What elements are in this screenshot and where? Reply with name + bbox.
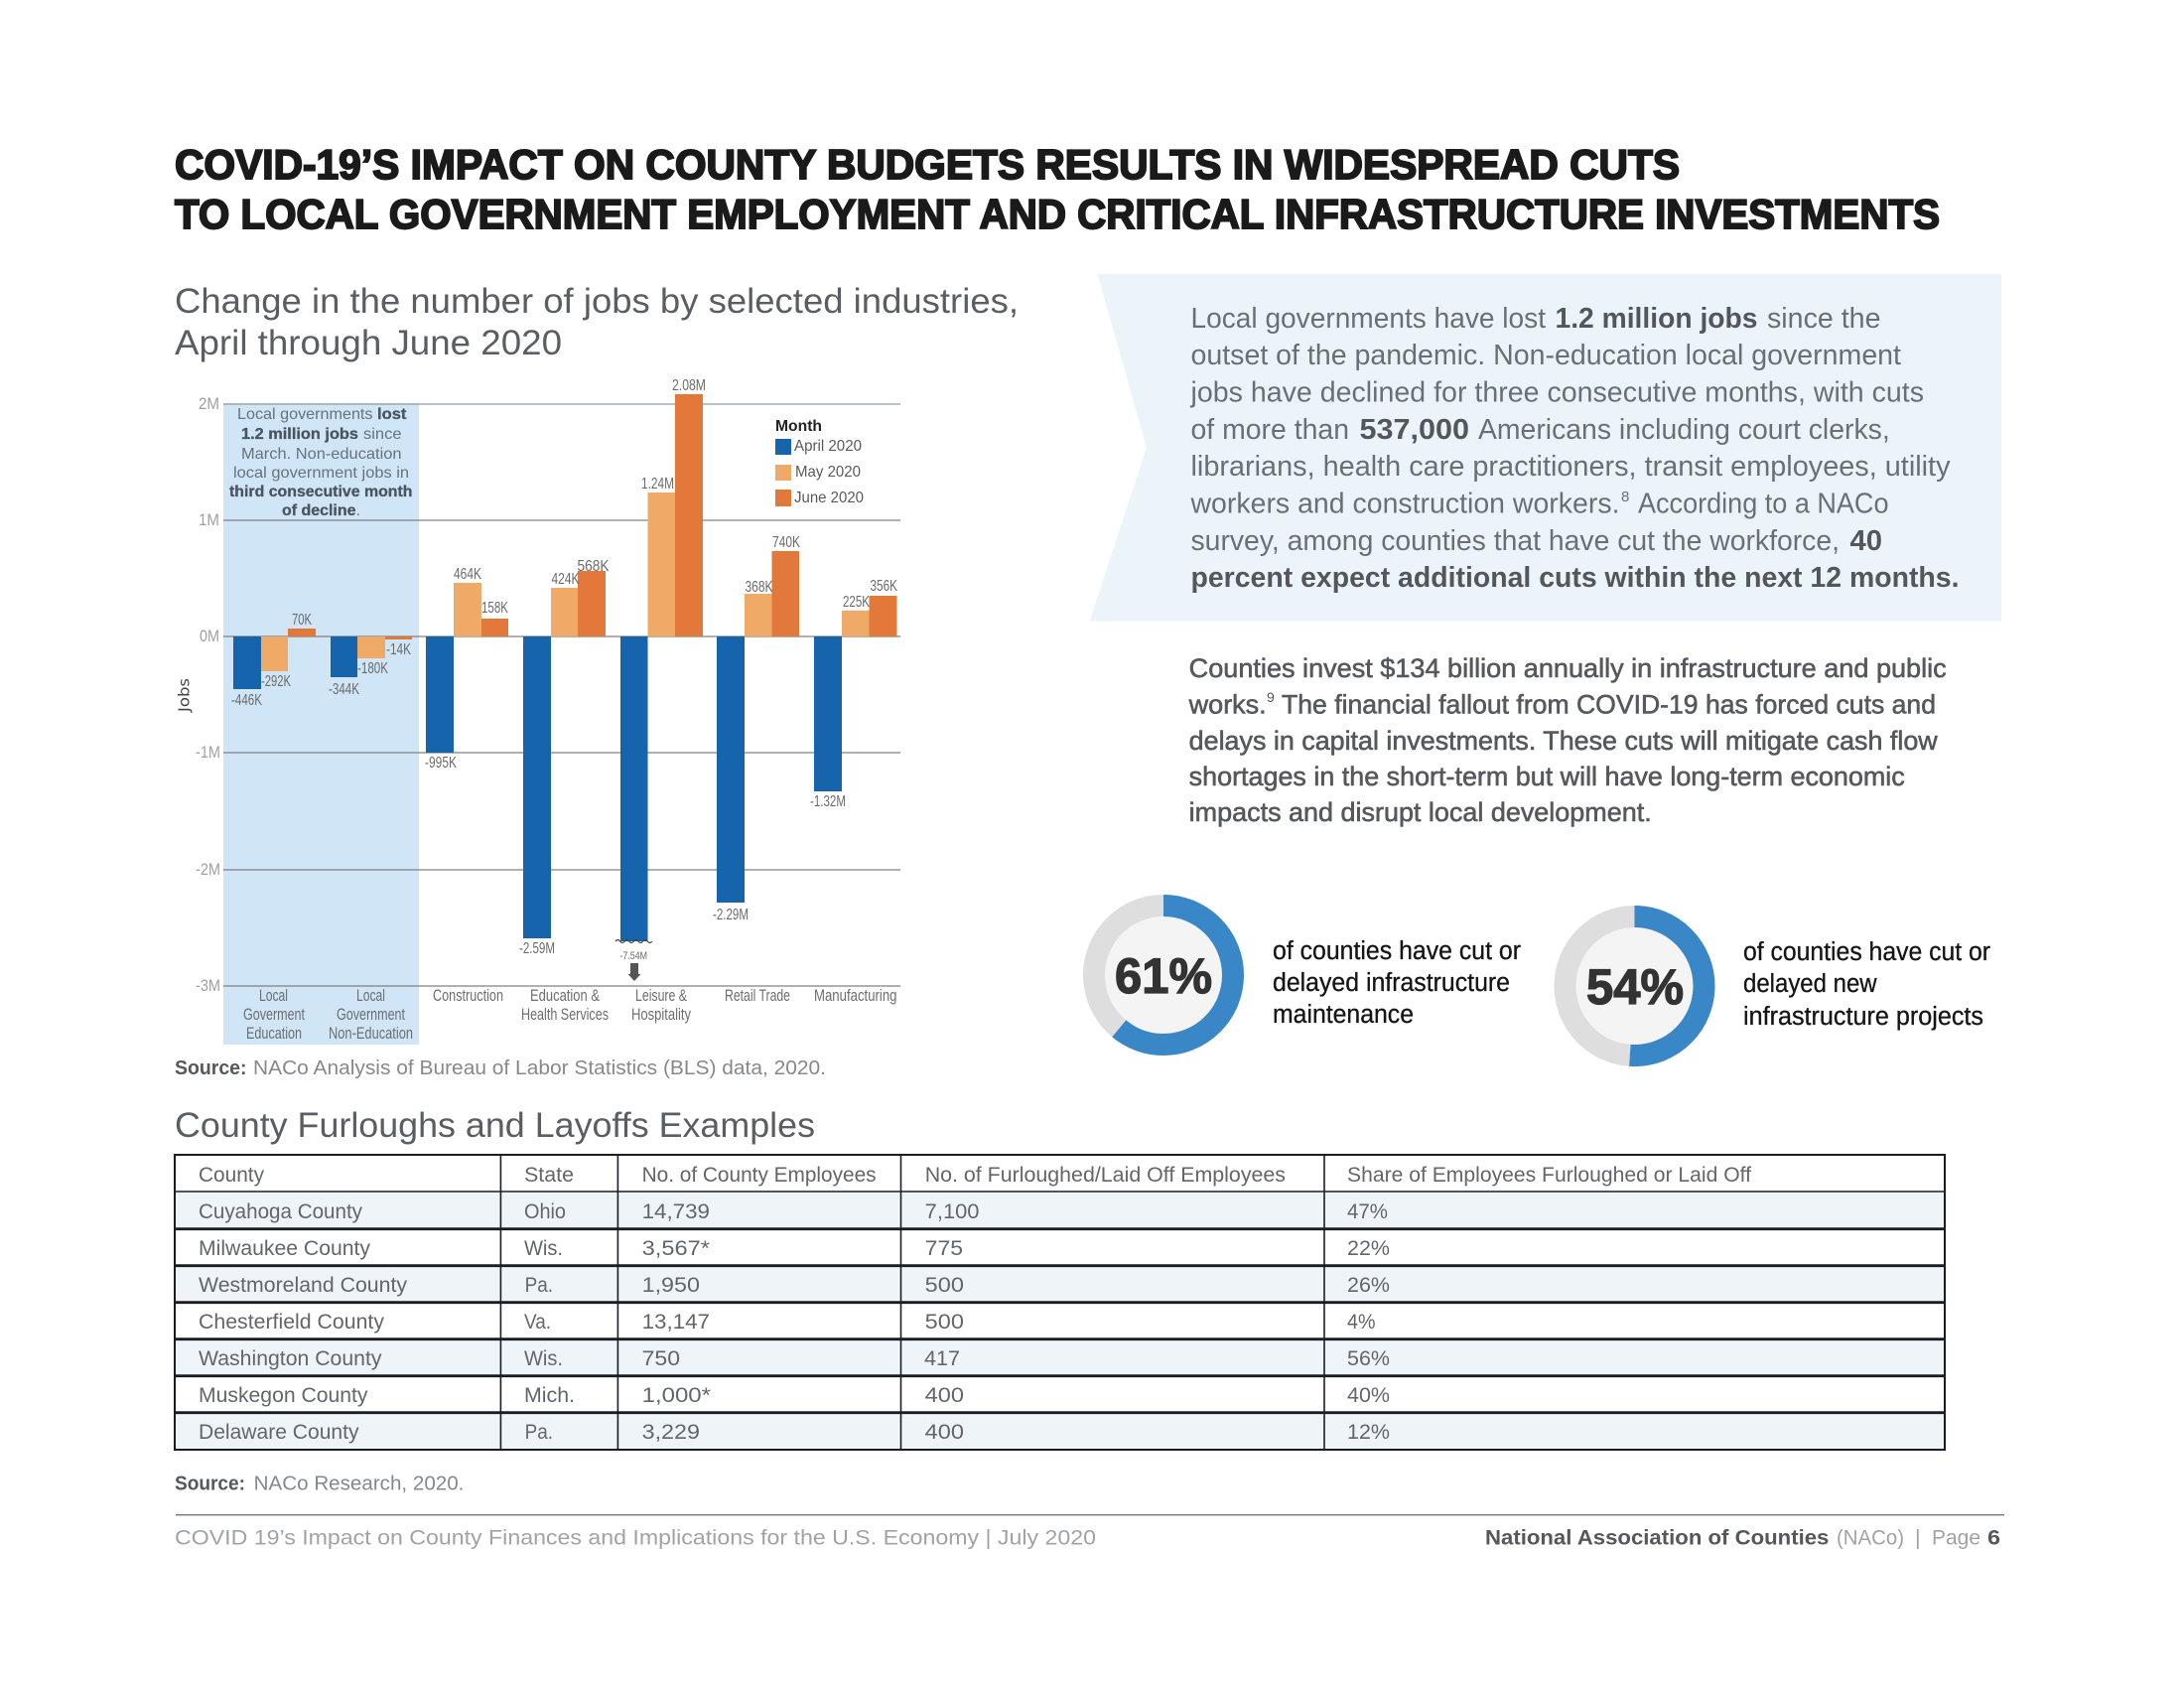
data labels: -14K bbox=[386, 641, 411, 658]
data labels: -446K bbox=[231, 692, 262, 709]
chart heading: Change in the number of jobs by selected industries, bbox=[175, 282, 1019, 321]
data labels: 356K bbox=[870, 578, 897, 595]
data labels: -180K bbox=[357, 660, 388, 677]
legend: Month bbox=[775, 418, 822, 435]
callout panel: 537,000 bbox=[1360, 414, 1469, 446]
row: Muskegon: Muskegon County bbox=[199, 1383, 368, 1407]
callout panel: According to a NACo bbox=[1638, 489, 1888, 520]
axis break on Leisure bar bbox=[615, 939, 652, 943]
row: Delaware: 12% bbox=[1347, 1420, 1390, 1444]
row: Muskegon: 400 bbox=[925, 1383, 964, 1407]
row: Chesterfield bbox=[199, 1310, 1376, 1334]
y axis labels bbox=[196, 395, 220, 995]
data labels: 225K bbox=[843, 594, 870, 611]
row: Delaware: Pa. bbox=[525, 1420, 553, 1444]
data labels: -344K bbox=[329, 681, 359, 698]
data labels: -995K bbox=[425, 755, 458, 772]
row: Westmoreland: 26% bbox=[1347, 1273, 1390, 1297]
row: Cuyahoga: 47% bbox=[1347, 1199, 1388, 1223]
callout panel: 1.2 million jobs bbox=[1555, 303, 1757, 335]
donut 54% caption bbox=[1743, 938, 1990, 1031]
table header row: No. of County Employees bbox=[642, 1163, 877, 1187]
annotation inside panel: Local governments bbox=[237, 406, 373, 423]
table header row: No. of Furloughed/Laid Off Employees bbox=[925, 1163, 1286, 1187]
row: Westmoreland bbox=[199, 1273, 1390, 1297]
chart heading: April through June 2020 bbox=[175, 324, 562, 362]
category labels: Education & bbox=[530, 987, 600, 1005]
row: Delaware: 3,229 bbox=[642, 1420, 700, 1444]
chart heading bbox=[175, 282, 1019, 362]
y axis title: Jobs bbox=[175, 678, 193, 713]
y axis labels: 1M bbox=[199, 511, 219, 529]
data labels: 158K bbox=[481, 600, 508, 617]
table header row bbox=[199, 1163, 1751, 1187]
row: Delaware: 400 bbox=[925, 1420, 964, 1444]
infrastructure paragraph: 9 bbox=[1267, 689, 1275, 705]
donut 61% caption: of counties have cut or bbox=[1273, 937, 1521, 965]
category labels bbox=[243, 987, 897, 1043]
callout panel: jobs have declined for three consecutive months, with cuts bbox=[1189, 377, 1924, 409]
row: Muskegon: 40% bbox=[1347, 1383, 1390, 1407]
title: COVID-19’S IMPACT ON COUNTY BUDGETS RESULTS IN WIDESPREAD CUTS bbox=[175, 141, 1680, 188]
data labels: 568K bbox=[578, 558, 610, 575]
footer: publication: COVID 19’s Impact on County Finances and Implications for the U.S. Economy | July 2020 bbox=[175, 1525, 1096, 1549]
data labels: 424K bbox=[552, 571, 580, 588]
donut 61% caption bbox=[1273, 937, 1521, 1029]
bars: June 2020 bbox=[288, 394, 897, 639]
category labels: Education bbox=[246, 1025, 302, 1043]
infrastructure paragraph: The financial fallout from COVID-19 has forced cuts and bbox=[1282, 689, 1936, 719]
row: Chesterfield: Va. bbox=[524, 1310, 551, 1334]
data labels: 464K bbox=[454, 566, 482, 583]
category labels: Government bbox=[337, 1006, 405, 1024]
row: Washington: 56% bbox=[1347, 1346, 1390, 1370]
row: Washington: Washington County bbox=[199, 1346, 382, 1370]
callout panel: Local governments have lost bbox=[1191, 303, 1546, 335]
row: Cuyahoga: 7,100 bbox=[925, 1199, 980, 1223]
row: Muskegon: 1,000* bbox=[642, 1383, 712, 1407]
donut 54% caption: delayed new bbox=[1743, 970, 1877, 998]
y axis labels: -2M bbox=[196, 861, 220, 879]
row: Cuyahoga: Cuyahoga County bbox=[199, 1199, 362, 1223]
category labels: Non-Education bbox=[329, 1025, 413, 1043]
data labels: 1.24M bbox=[641, 476, 674, 492]
infrastructure paragraph: works. bbox=[1188, 689, 1267, 719]
donut: 61% maintenance: 61% bbox=[1115, 948, 1212, 1004]
category labels: Manufacturing bbox=[814, 987, 897, 1005]
footer: organization and page: 6 bbox=[1987, 1525, 2000, 1549]
data labels: 2.08M bbox=[672, 377, 706, 394]
row: Delaware bbox=[199, 1420, 1390, 1444]
donut 61% caption: maintenance bbox=[1273, 1001, 1414, 1029]
bars: May 2020 bbox=[261, 492, 870, 671]
row: Milwaukee bbox=[199, 1236, 1390, 1260]
annotation inside panel: lost bbox=[377, 406, 407, 423]
table header row: State bbox=[524, 1163, 574, 1187]
row: Delaware: Delaware County bbox=[199, 1420, 359, 1444]
donut: 61% maintenance bbox=[1094, 906, 1233, 1045]
category labels: Local bbox=[356, 987, 385, 1005]
annotation inside panel: third consecutive month bbox=[229, 484, 413, 500]
title: TO LOCAL GOVERNMENT EMPLOYMENT AND CRITICAL INFRASTRUCTURE INVESTMENTS bbox=[175, 191, 1940, 237]
footer: organization and page bbox=[1485, 1525, 2000, 1549]
y axis labels: -3M bbox=[196, 977, 220, 995]
category labels: Construction bbox=[433, 987, 503, 1005]
footer: organization and page: (NACo) bbox=[1837, 1525, 1904, 1549]
annotation inside panel: of decline bbox=[282, 502, 356, 519]
furloughs and layoffs table bbox=[175, 1155, 1945, 1450]
highlight panel: local government bbox=[223, 403, 419, 1045]
data labels: -2.29M bbox=[713, 907, 749, 923]
y axis labels: 0M bbox=[200, 628, 219, 645]
callout panel: since the bbox=[1767, 303, 1880, 335]
row: Cuyahoga bbox=[199, 1199, 1388, 1223]
donut 54% caption: infrastructure projects bbox=[1743, 1003, 1983, 1031]
row: Washington: 417 bbox=[924, 1346, 960, 1370]
donut: 54% new projects: 54% bbox=[1586, 959, 1684, 1015]
infrastructure paragraph bbox=[1188, 653, 1947, 827]
data labels bbox=[231, 377, 897, 962]
data labels: 70K bbox=[292, 612, 312, 629]
row: Westmoreland: 500 bbox=[925, 1273, 964, 1297]
row: Milwaukee: Wis. bbox=[524, 1236, 563, 1260]
table source: Source: bbox=[175, 1472, 245, 1495]
callout panel: 40 bbox=[1850, 525, 1882, 557]
y axis labels: -1M bbox=[196, 744, 220, 762]
chart source: Source: bbox=[175, 1056, 246, 1079]
callout panel: of more than bbox=[1191, 414, 1349, 446]
row: Milwaukee: Milwaukee County bbox=[199, 1236, 370, 1260]
annotation inside panel: . bbox=[355, 502, 360, 519]
legend: May 2020 bbox=[795, 464, 861, 481]
annotation inside panel bbox=[229, 406, 413, 519]
row: Milwaukee: 22% bbox=[1347, 1236, 1390, 1260]
row: Muskegon: Mich. bbox=[524, 1383, 575, 1407]
row: Cuyahoga: 14,739 bbox=[642, 1199, 710, 1223]
data labels: -2.59M bbox=[519, 940, 555, 957]
data labels: -292K bbox=[261, 673, 291, 690]
row: Washington bbox=[199, 1346, 1390, 1370]
category labels: Retail Trade bbox=[725, 987, 790, 1005]
row: Chesterfield: 500 bbox=[925, 1310, 964, 1334]
bars: April 2020 bbox=[233, 636, 842, 941]
legend: April 2020 bbox=[794, 438, 862, 455]
infrastructure paragraph: impacts and disrupt local development. bbox=[1189, 797, 1652, 827]
arrow: bar continues down bbox=[627, 963, 641, 981]
infrastructure paragraph: delays in capital investments. These cuts will mitigate cash flow bbox=[1189, 726, 1939, 756]
legend: June 2020 bbox=[794, 490, 864, 506]
footer: organization and page: | bbox=[1915, 1525, 1921, 1549]
donut 61% caption: delayed infrastructure bbox=[1273, 969, 1510, 997]
data labels: 368K bbox=[745, 579, 773, 596]
annotation inside panel: since bbox=[363, 426, 402, 443]
row: Muskegon bbox=[199, 1383, 1390, 1407]
row: Westmoreland: 1,950 bbox=[642, 1273, 700, 1297]
callout panel: outset of the pandemic. Non-education local government bbox=[1191, 340, 1901, 371]
table source: NACo Research, 2020. bbox=[254, 1472, 464, 1495]
row: Cuyahoga: Ohio bbox=[524, 1199, 566, 1223]
row: Milwaukee: 775 bbox=[925, 1236, 963, 1260]
data labels: -1.32M bbox=[810, 793, 846, 810]
annotation inside panel: March. Non-education bbox=[241, 446, 401, 463]
annotation inside panel: 1.2 million jobs bbox=[241, 426, 358, 443]
legend bbox=[775, 418, 864, 506]
row: Milwaukee: 3,567* bbox=[642, 1236, 711, 1260]
chart source: NACo Analysis of Bureau of Labor Statistics (BLS) data, 2020. bbox=[253, 1056, 826, 1079]
row: Chesterfield: 13,147 bbox=[642, 1310, 710, 1334]
callout panel: 8 bbox=[1621, 489, 1629, 505]
data labels: -7.54M bbox=[619, 950, 647, 962]
donut: 54% new projects bbox=[1565, 916, 1704, 1055]
row: Westmoreland: Pa. bbox=[525, 1273, 553, 1297]
table heading: County Furloughs and Layoffs Examples bbox=[175, 1106, 815, 1145]
category labels: Local bbox=[259, 987, 288, 1005]
callout panel: workers and construction workers. bbox=[1190, 489, 1620, 520]
table header row: Share of Employees Furloughed or Laid Off bbox=[1347, 1163, 1751, 1187]
category labels: Health Services bbox=[521, 1006, 609, 1024]
callout panel: percent expect additional cuts within the next 12 months. bbox=[1191, 562, 1960, 594]
title bbox=[175, 141, 1940, 237]
footer: organization and page: National Association of Counties bbox=[1485, 1525, 1829, 1549]
row: Chesterfield: Chesterfield County bbox=[199, 1310, 384, 1334]
row: Westmoreland: Westmoreland County bbox=[199, 1273, 407, 1297]
callout panel bbox=[1090, 274, 2001, 622]
category labels: Leisure & bbox=[635, 987, 687, 1005]
infrastructure paragraph: Counties invest $134 billion annually in infrastructure and public bbox=[1189, 653, 1947, 683]
table header row: County bbox=[199, 1163, 264, 1187]
callout panel: librarians, health care practitioners, transit employees, utility bbox=[1191, 451, 1951, 483]
footer: organization and page: Page bbox=[1932, 1525, 1980, 1549]
category labels: Hospitality bbox=[631, 1006, 692, 1024]
data labels: 740K bbox=[772, 534, 801, 551]
row: Chesterfield: 4% bbox=[1347, 1310, 1376, 1334]
category labels: Goverment bbox=[243, 1006, 305, 1024]
annotation inside panel: local government jobs in bbox=[233, 465, 409, 482]
callout panel: Americans including court clerks, bbox=[1478, 414, 1890, 446]
row: Washington: Wis. bbox=[524, 1346, 563, 1370]
y axis labels: 2M bbox=[199, 395, 219, 413]
bar chart: change in jobs bbox=[175, 377, 900, 1045]
infrastructure paragraph: shortages in the short-term but will have long-term economic bbox=[1189, 762, 1905, 791]
donut 54% caption: of counties have cut or bbox=[1743, 938, 1990, 966]
callout panel: survey, among counties that have cut the workforce, bbox=[1191, 525, 1840, 557]
row: Washington: 750 bbox=[642, 1346, 680, 1370]
